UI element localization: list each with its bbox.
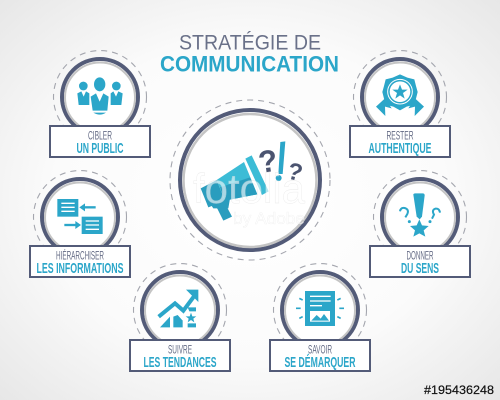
label top: CIBLER [88,128,112,142]
panel: central megaphone [170,100,330,260]
label top: SAVOIR [308,342,332,356]
label bottom: AUTHENTIQUE [368,140,432,157]
panel: donner du sens [370,170,470,277]
label bottom: SE DÉMARQUER [284,354,356,371]
label top: RESTER [386,128,414,142]
panel: suivre les tendances [130,264,230,371]
watermark [193,165,306,228]
label box [130,340,230,371]
label box [50,126,150,157]
icon: rosette badge [376,74,424,116]
icon: question mark right: ? [285,158,305,187]
label bottom: LES TENDANCES [144,354,216,371]
label box [30,246,130,277]
watermark word: fotolia [193,165,306,212]
image id: #195436248 [424,383,494,397]
watermark byline: by Adobe [233,209,305,228]
icon: people [77,77,123,115]
icon: document with rays [296,291,344,326]
label top: SUIVRE [168,342,192,356]
label top: DONNER [406,248,434,262]
label bottom: DU SENS [401,260,439,277]
icon: question mark left: ? [256,143,280,180]
label top: HIÉRARCHISER [56,248,104,262]
panel: savoir se démarquer [270,264,370,371]
label bottom: UN PUBLIC [76,140,124,157]
icon: rising chart [159,290,198,327]
panel: hiérarchiser les informations [30,170,130,277]
label box [370,246,470,277]
title line 1: STRATÉGIE DE [179,30,321,54]
title [160,30,339,77]
label box [350,126,450,157]
icon: exclamation and star [400,193,440,237]
title line 2: COMMUNICATION [160,52,339,77]
icon: ordered lists [57,199,103,234]
panel: cibler un public [50,50,150,157]
label box [270,340,370,371]
panel: rester authentique [350,50,450,157]
icon: megaphone [201,141,285,221]
label bottom: LES INFORMATIONS [36,260,124,277]
